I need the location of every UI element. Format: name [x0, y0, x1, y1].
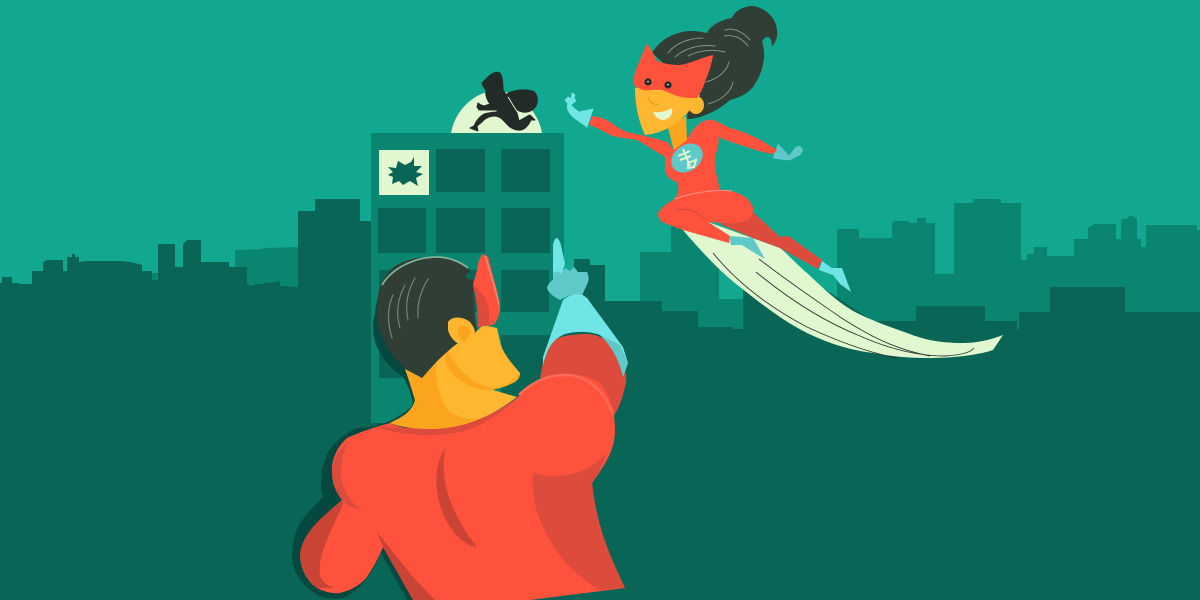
- superheroine flying: [565, 6, 1003, 358]
- jaw shading: [445, 350, 520, 390]
- hero torso: [300, 374, 625, 600]
- torso shading: under arm: [377, 532, 435, 600]
- heroine back boot: [819, 261, 851, 292]
- shoulder highlight: [519, 375, 613, 415]
- heroine back leg: [720, 212, 822, 269]
- hero glove cuff: [543, 293, 628, 377]
- heroine nose shade: [648, 97, 658, 104]
- heroine front boot: [729, 236, 765, 259]
- heroine thigh and front leg: [658, 190, 753, 243]
- hair highlights: [668, 29, 750, 104]
- hair top highlight: [382, 257, 468, 285]
- heroine knee shade: [677, 209, 703, 218]
- heroine cape: [683, 222, 1003, 358]
- heroine torso and arms: [589, 116, 777, 205]
- thief silhouette with sack: [470, 72, 538, 131]
- skyline: mid-tone buildings: [152, 199, 1200, 340]
- hair strands: [388, 278, 428, 338]
- torso shading: lower right: [533, 452, 625, 590]
- hero dark outline shadow: [292, 270, 475, 600]
- hero pointing hand: [547, 238, 589, 300]
- loot sack: [506, 89, 538, 113]
- mask notch: [466, 272, 474, 280]
- hero mask ear: [466, 255, 500, 327]
- chest emblem: [666, 138, 708, 178]
- torso shading: collar: [377, 398, 517, 435]
- heroine left glove: [565, 93, 593, 127]
- heroine ear: [688, 96, 704, 114]
- mask eyes: [644, 78, 652, 86]
- neck shading: [390, 363, 477, 429]
- heroine face: [635, 80, 700, 135]
- heroine mask: [633, 43, 713, 98]
- building windows: [378, 149, 564, 423]
- heroine hair bun: [652, 6, 777, 119]
- hero ear: [448, 318, 475, 347]
- hero hair: [377, 257, 477, 377]
- superhero seen from behind: [292, 238, 628, 600]
- heroine neck: [668, 116, 687, 151]
- hero neck and jaw: [390, 325, 520, 429]
- building: [371, 133, 564, 423]
- broken window with explosion: [379, 150, 429, 195]
- thigh highlight: [675, 190, 732, 199]
- torso shading: arm and shoulder: [300, 500, 343, 588]
- hero raised upper arm: [540, 334, 626, 417]
- thief body: [470, 72, 535, 131]
- heroine smile: [653, 108, 672, 120]
- torso shading: back crease: [436, 448, 477, 547]
- cape fold lines: [713, 253, 974, 358]
- moon: [451, 91, 542, 133]
- sack edge highlight: [508, 97, 519, 114]
- skyline: dark foreground city and ground: [0, 199, 1200, 600]
- heroine right glove: [773, 144, 803, 160]
